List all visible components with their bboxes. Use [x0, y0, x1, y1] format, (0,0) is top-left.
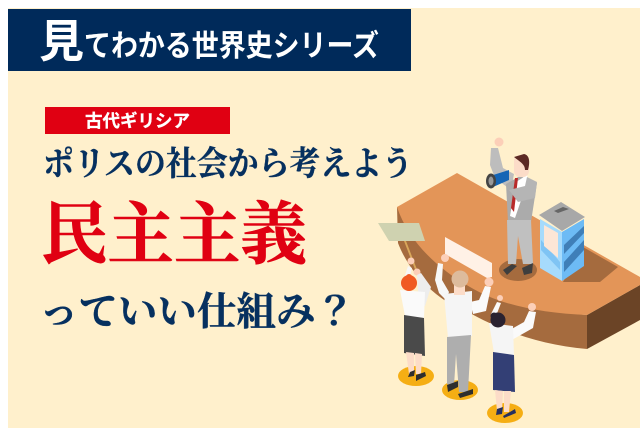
category label: 古代ギリシア — [85, 111, 190, 131]
protester: woman with orange hair — [398, 258, 434, 386]
heading line 2: っていい仕組み？ — [39, 291, 355, 334]
placard: green sign — [378, 223, 425, 272]
speaker figure with megaphone — [486, 138, 537, 281]
ballot box — [539, 202, 585, 281]
main heading: 民主主義 — [41, 197, 307, 273]
title banner: 見 — [39, 16, 84, 67]
title banner — [8, 9, 411, 71]
protester: woman with dark hair — [487, 295, 536, 423]
ballot box shadow — [563, 247, 618, 282]
title banner: てわかる世界史シリーズ — [84, 29, 379, 63]
heading line 1: ポリスの社会から考えよう — [43, 146, 413, 183]
category label — [45, 107, 230, 134]
protester: man in grey trousers — [435, 254, 494, 400]
placard: cream sign — [445, 237, 492, 278]
stage — [397, 173, 640, 349]
